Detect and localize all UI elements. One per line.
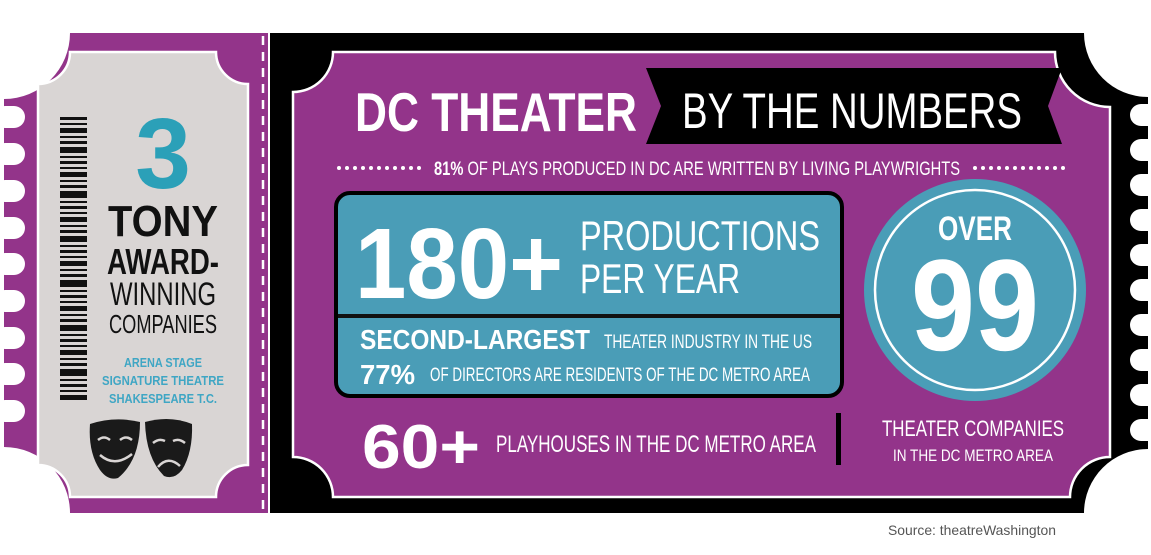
big number 3: 3 (135, 98, 191, 210)
panel: teal stats box: PRODUCTIONS (580, 212, 820, 259)
stat: 60+ playhouses: PLAYHOUSES IN THE DC METRO AREA (496, 431, 816, 458)
title banner: BY THE NUMBERS: BY THE NUMBERS (682, 83, 1022, 139)
stat: second-largest: 77% (360, 359, 415, 390)
barcode (60, 117, 87, 400)
stat: second-largest: OF DIRECTORS ARE RESIDENTS OF THE DC METRO AREA (430, 365, 810, 386)
stat: 180+ productions: 180+ (355, 208, 563, 320)
icon: theater masks (90, 419, 192, 479)
tony award text: COMPANIES (109, 309, 217, 339)
circle: over 99 (864, 179, 1086, 401)
ticket stub: purple (0, 33, 268, 513)
title banner: BY THE NUMBERS (646, 68, 1062, 144)
stat: 60+ playhouses: 60+ (362, 413, 480, 482)
stat: second-largest: THEATER INDUSTRY IN THE US (604, 332, 812, 353)
ticket main body: black (270, 33, 1151, 513)
stat label: theater companies (882, 416, 1064, 465)
circle: over 99: OVER (938, 210, 1012, 248)
panel: teal stats box: PER YEAR (580, 255, 740, 302)
company list: SIGNATURE THEATRE (102, 373, 224, 388)
stat: 60+ playhouses (362, 413, 816, 482)
tony award text: AWARD- (107, 241, 219, 282)
company list (102, 355, 224, 406)
panel: grey stub ticket (38, 52, 248, 497)
source: Source: theatreWashington (888, 522, 1056, 538)
stat: second-largest: SECOND-LARGEST (360, 324, 590, 355)
stat: 81% playwrights: 81% OF PLAYS PRODUCED IN DC ARE WRITTEN BY LIVING PLAYWRIGHTS (434, 159, 960, 180)
stat label: theater companies: THEATER COMPANIES (882, 416, 1064, 441)
tony award text: WINNING (110, 276, 216, 312)
panel: main purple (293, 52, 1110, 497)
tony award text: TONY (108, 197, 218, 246)
title: DC THEATER: DC THEATER (355, 81, 637, 143)
company list: SHAKESPEARE T.C. (109, 391, 217, 406)
tony award text (107, 197, 219, 339)
company list: ARENA STAGE (124, 355, 202, 370)
stat: second-largest (360, 324, 812, 390)
panel: teal stats box (336, 193, 842, 396)
stat label: theater companies: IN THE DC METRO AREA (893, 446, 1054, 465)
circle: over 99: 99 (911, 232, 1039, 378)
